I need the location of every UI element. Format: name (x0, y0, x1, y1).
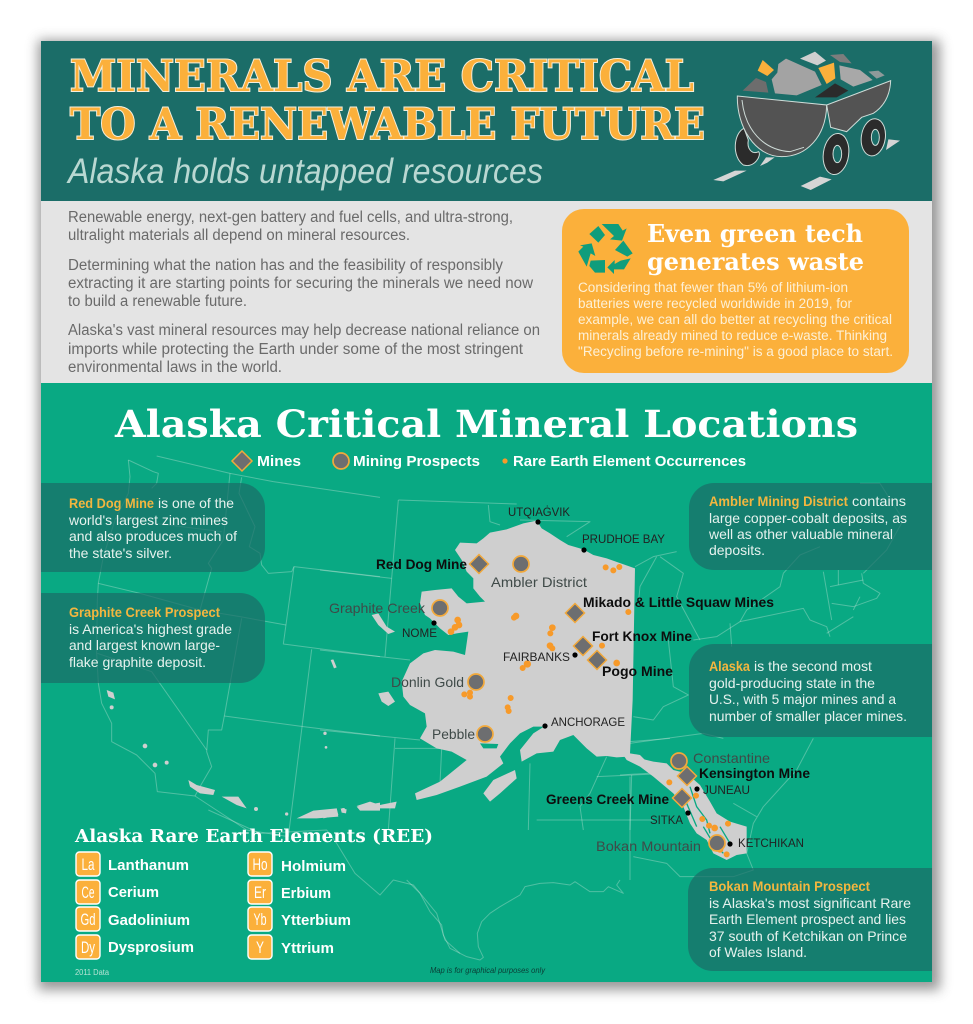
subtitle: Alaska holds untapped resources (66, 152, 543, 191)
element names: Dysprosium (108, 939, 194, 956)
map labels: prospects: Constantine (693, 750, 770, 766)
callout: Ambler Mining District: Ambler Mining District (709, 493, 848, 509)
callout: Ambler Mining District: deposits. (709, 542, 765, 558)
callout: Red Dog Mine: the state's silver. (69, 545, 172, 561)
callout: Bokan Mountain Prospect: is Alaska's most significant Rare (709, 895, 911, 911)
legend: rare earth occurrences: Rare Earth Element Occurrences (513, 454, 746, 470)
rare earth occurrence dots (448, 564, 731, 857)
callout: Ambler Mining District: well as other valuable mineral (708, 526, 893, 542)
callout: Bokan Mountain Prospect (688, 868, 932, 971)
map labels: mines (376, 556, 810, 807)
map labels: mines: Greens Creek Mine (546, 791, 669, 807)
element symbols: Gd (80, 910, 96, 929)
map labels: mines: Mikado & Little Squaw Mines (583, 594, 774, 610)
legend: mining prospects: Mining Prospects (353, 454, 480, 470)
map: Alaska (107, 519, 747, 860)
footnote: map disclaimer: Map is for graphical purposes only (430, 966, 546, 975)
callout: Ambler Mining District: large copper-cobalt deposits, as (709, 510, 907, 526)
element names: Yttrium (281, 940, 334, 957)
element names: Lanthanum (108, 857, 189, 874)
mine markers (470, 554, 696, 808)
element symbols: La (82, 855, 95, 874)
map labels: prospects: Graphite Creek (329, 600, 426, 616)
element symbols: Ho (252, 855, 268, 874)
section title: Alaska Critical Mineral Locations (114, 402, 858, 446)
map labels: cities: NOME (402, 626, 437, 640)
map labels: mines: Red Dog Mine (376, 556, 467, 572)
intro paragraph 3: Alaska's vast mineral resources may help decrease national reliance on (68, 322, 540, 339)
intro paragraph 1: Renewable energy, next-gen battery and fuel cells, and ultra-strong, (68, 209, 513, 226)
callout: Bokan Mountain Prospect: of Wales Island. (709, 944, 807, 960)
callout: Red Dog Mine: and also produces much of (69, 528, 237, 544)
body text: Considering that fewer than 5% of lithium-ion (578, 280, 848, 295)
city dots (431, 519, 733, 847)
legend: mines: Mines (257, 454, 301, 470)
map labels: cities: JUNEAU (703, 783, 750, 797)
panel: rare earth elements (74, 827, 433, 959)
callout: Bokan Mountain Prospect: 37 south of Ketchikan on Prince (709, 928, 907, 944)
callout: Bokan Mountain Prospect: Earth Element prospect and lies (709, 911, 906, 927)
map labels: prospects: Bokan Mountain (596, 838, 701, 854)
map labels: cities: UTQIAĠVIK (508, 505, 570, 519)
callout: Graphite Creek Prospect: is America's highest grade (69, 621, 232, 637)
element tiles (76, 852, 272, 959)
intro paragraph 2: Determining what the nation has and the feasibility of responsibly (68, 257, 503, 274)
callout: Graphite Creek Prospect: flake graphite deposit. (69, 654, 206, 670)
callout: Alaska gold (689, 644, 932, 737)
icon: recycle (578, 224, 633, 274)
map labels: cities: PRUDHOE BAY (582, 532, 665, 546)
callout: Ambler Mining District (689, 483, 932, 570)
callout: green tech waste (562, 209, 909, 373)
element symbols: Er (254, 883, 266, 902)
heading (647, 219, 864, 276)
title (70, 52, 705, 150)
callout: Alaska gold: Alaska (709, 658, 750, 674)
callout: Alaska gold: number of smaller placer mines. (709, 708, 907, 724)
map labels: prospects: Donlin Gold (391, 674, 464, 690)
callout: Red Dog Mine: is one of the (158, 495, 234, 511)
map labels: cities: ANCHORAGE (551, 715, 625, 729)
callout: Alaska gold: is the second most (754, 658, 872, 674)
callout: Graphite Creek Prospect: and largest known large- (69, 637, 220, 653)
body text: example, we can all do better at recycling the critical (578, 312, 892, 327)
callout: Bokan Mountain Prospect: Bokan Mountain Prospect (709, 878, 870, 894)
element names (108, 857, 351, 957)
element names: Erbium (281, 885, 331, 902)
element names: Gadolinium (108, 912, 190, 929)
body text: batteries were recycled worldwide in 2019, for (578, 296, 852, 311)
element names: Ytterbium (281, 912, 351, 929)
callout: Red Dog Mine: world's largest zinc mines (68, 512, 228, 528)
map labels: mines: Fort Knox Mine (592, 628, 692, 644)
map labels: cities: SITKA (650, 813, 683, 827)
element names: Cerium (108, 884, 159, 901)
element symbols (80, 855, 268, 957)
map labels: cities: FAIRBANKS (503, 650, 570, 664)
map section background (41, 383, 932, 982)
callout: Alaska gold: U.S., with 5 major mines and a (709, 691, 896, 707)
intro paragraph 3: imports while protecting the Earth under some of the most stringent (68, 341, 524, 358)
intro panel (41, 201, 932, 383)
intro paragraph 3: environmental laws in the world. (68, 359, 282, 376)
map labels: prospects: Ambler District (491, 574, 587, 590)
intro paragraph 2: extracting it are starting points for securing the minerals we need now (68, 275, 534, 292)
map labels: prospects (329, 574, 770, 854)
title: MINERALS ARE CRITICAL (70, 52, 694, 102)
heading: Even green tech (647, 219, 863, 248)
body text: minerals already mined to reduce e-waste. Thinking (578, 328, 887, 343)
callout: Red Dog Mine: Red Dog Mine (69, 495, 154, 511)
map labels: cities: KETCHIKAN (738, 836, 804, 850)
element symbols: Dy (81, 938, 95, 957)
heading: generates waste (647, 247, 864, 276)
map labels: cities (402, 505, 804, 850)
intro paragraph 2: to build a renewable future. (68, 293, 247, 310)
legend: mines (232, 451, 301, 471)
title: TO A RENEWABLE FUTURE (70, 100, 705, 150)
callout: Graphite Creek Prospect (41, 593, 265, 683)
element symbols: Y (256, 938, 264, 957)
intro paragraph 2 (68, 257, 534, 310)
callout: Red Dog Mine (41, 483, 265, 572)
intro paragraph 1 (68, 209, 513, 244)
element names: Holmium (281, 858, 346, 875)
element symbols: Yb (254, 910, 266, 929)
intro paragraph 3 (68, 322, 540, 376)
callout: Ambler Mining District: contains (852, 493, 906, 509)
prospect markers (432, 556, 725, 851)
map labels: mines: Kensington Mine (699, 765, 810, 781)
intro paragraph 1: ultralight materials all depend on mineral resources. (68, 227, 410, 244)
element symbols: Ce (82, 883, 94, 902)
map labels: prospects: Pebble (432, 726, 475, 742)
callout: Alaska gold: gold-producing state in the (709, 675, 875, 691)
body text (578, 280, 893, 359)
body text: "Recycling before re-mining" is a good place to start. (578, 344, 893, 359)
background US map (97, 456, 903, 960)
header band (41, 41, 932, 201)
legend (232, 451, 746, 471)
footnote: data year: 2011 Data (75, 968, 110, 977)
map labels: mines: Pogo Mine (602, 663, 673, 679)
icon: mine cart (713, 52, 900, 190)
REE heading: Alaska Rare Earth Elements (REE) (74, 827, 433, 847)
callout: Graphite Creek Prospect: Graphite Creek Prospect (69, 604, 220, 620)
